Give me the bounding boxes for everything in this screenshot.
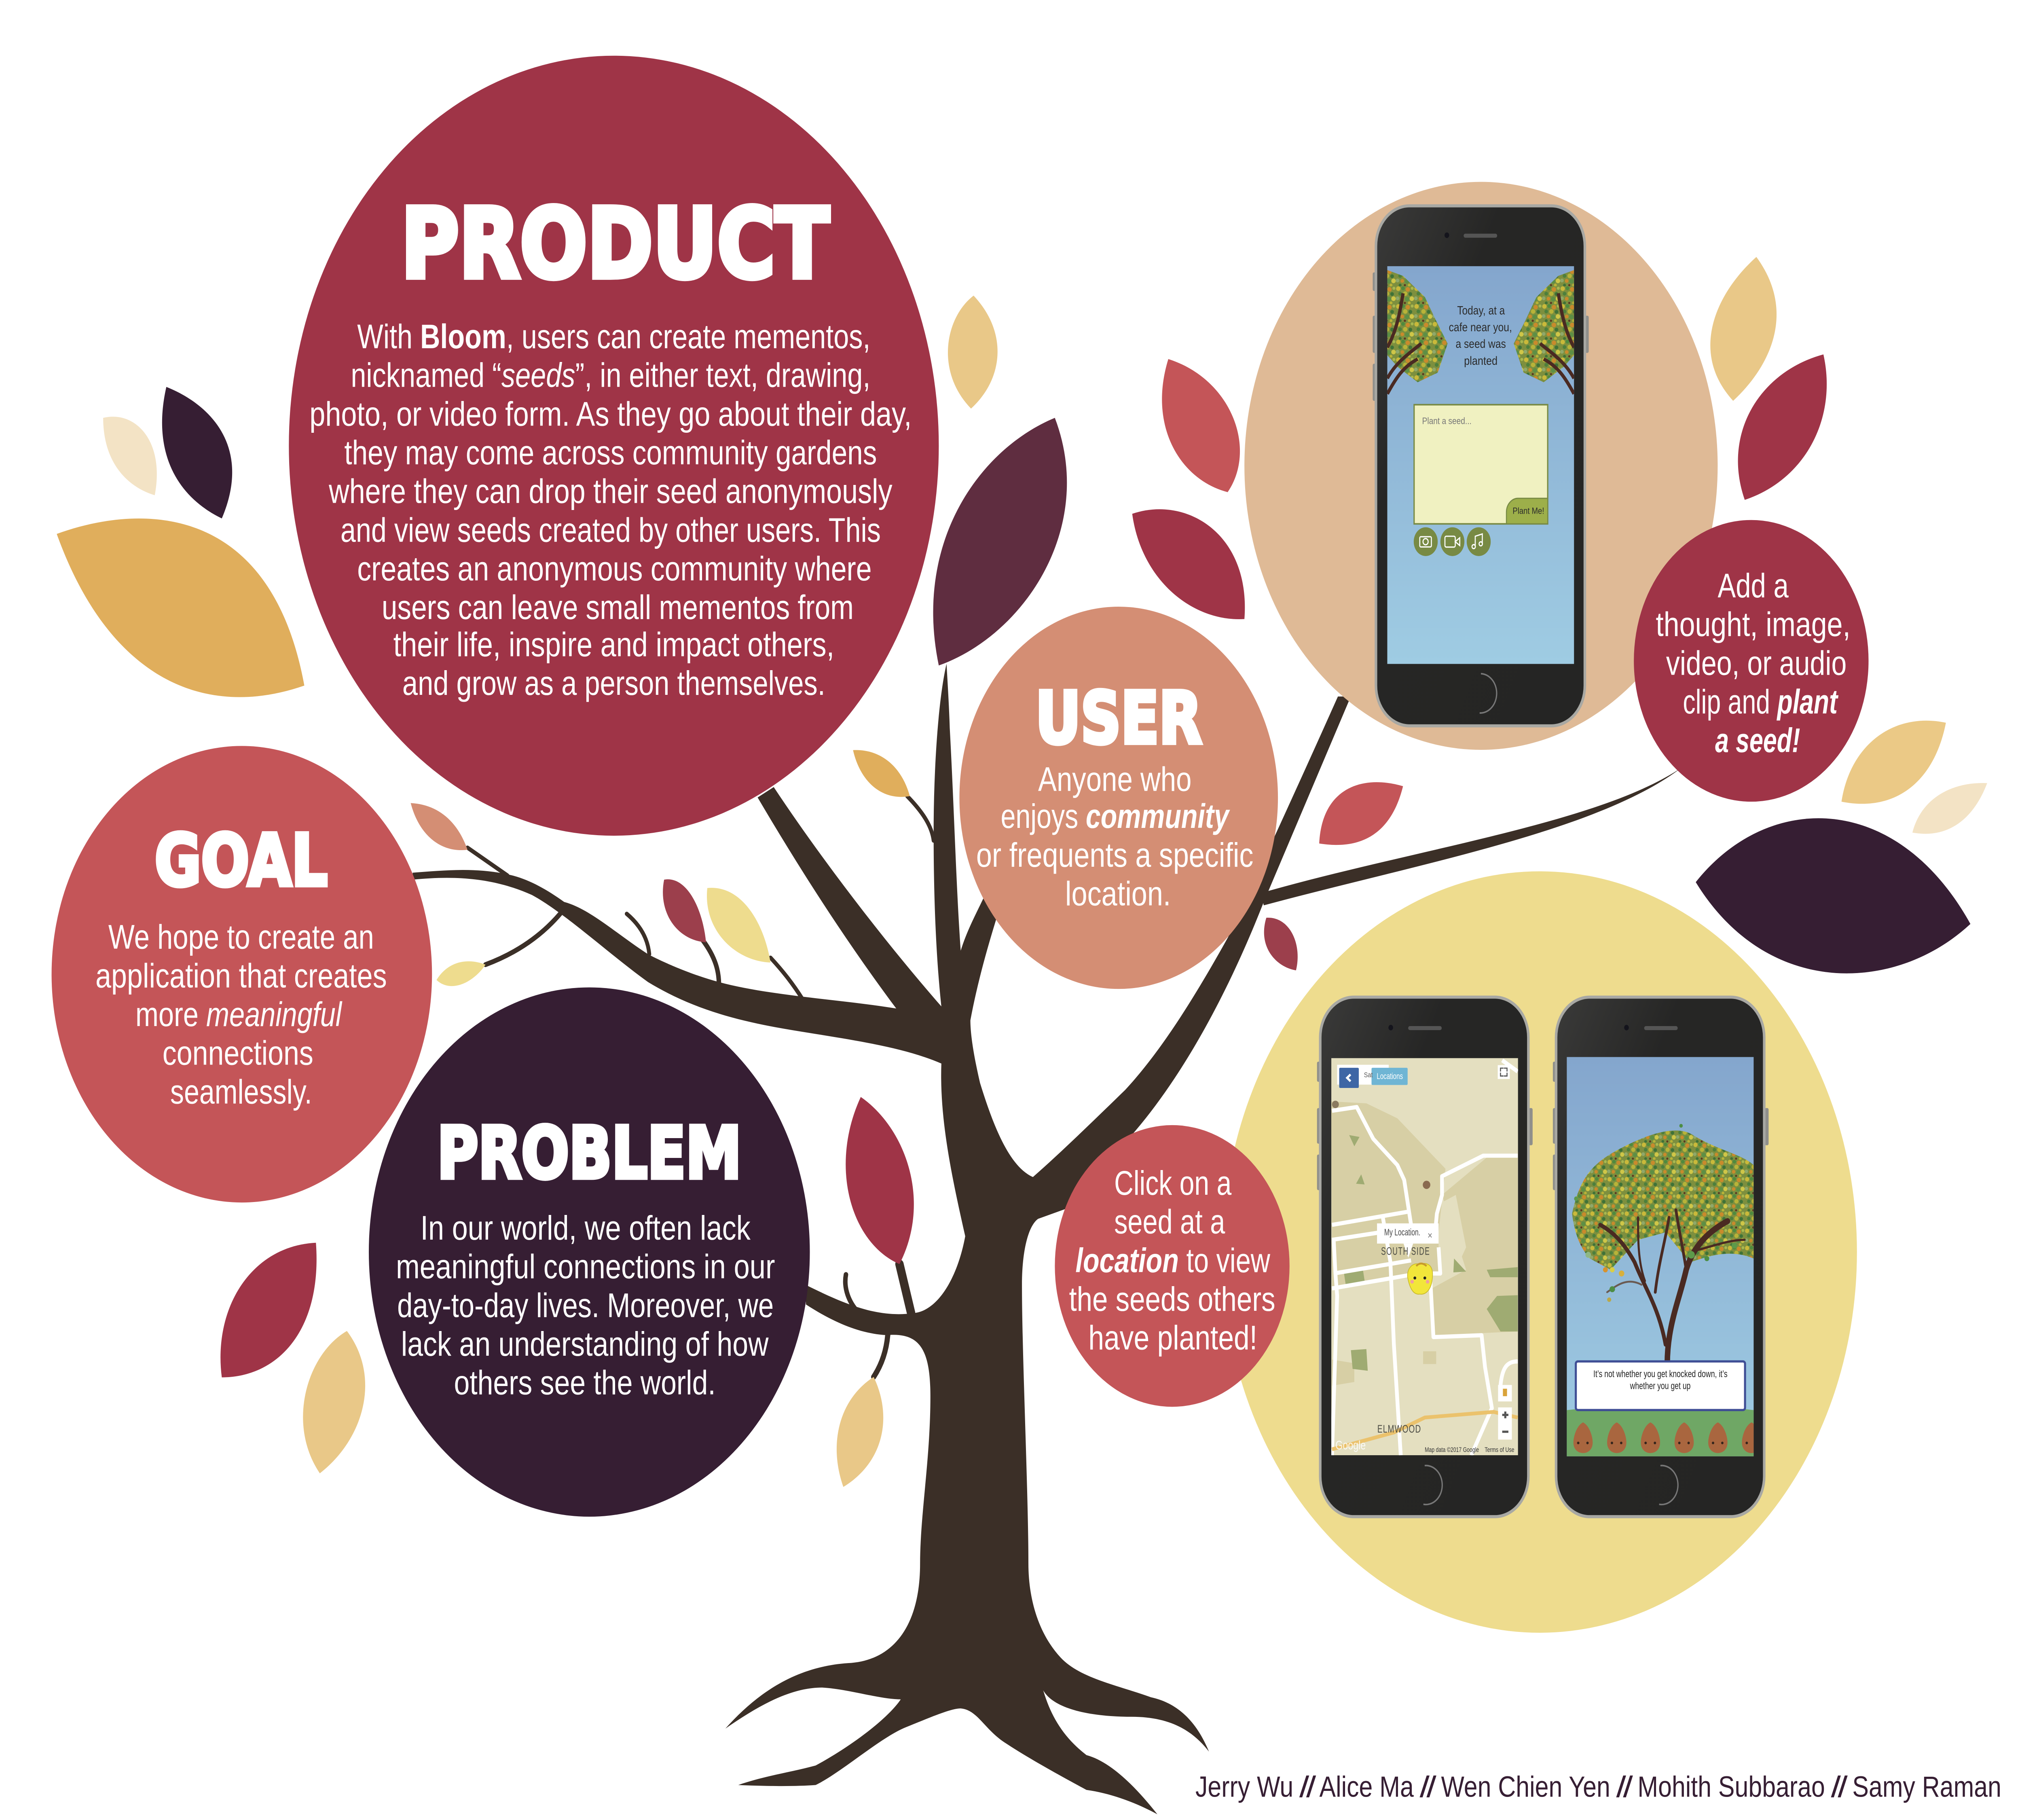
leaf: red xyxy=(1162,359,1240,492)
seed tree canopy xyxy=(1572,1130,1753,1270)
product description: where they can drop their seed anonymously xyxy=(328,473,893,510)
product description: and grow as a person themselves. xyxy=(402,665,825,703)
callout: click on a seed: Click on a xyxy=(1114,1164,1232,1202)
leaf: top tan xyxy=(948,296,998,408)
panel: problem xyxy=(369,987,810,1517)
callout: add a thought: Add a xyxy=(1717,567,1789,605)
leaf: big gold xyxy=(57,518,305,697)
map: SOUTH SIDE xyxy=(1381,1246,1430,1257)
leaf: lower left tan xyxy=(303,1331,365,1473)
map: My Location. xyxy=(1384,1227,1420,1238)
goal description: connections xyxy=(163,1035,313,1072)
map: Terms of Use xyxy=(1485,1446,1514,1454)
media buttons xyxy=(1414,527,1491,556)
product description: users can leave small mementos from xyxy=(382,589,854,626)
pepper marker xyxy=(1408,1263,1432,1294)
leaf: rose xyxy=(663,879,706,942)
map: Map data ©2017 Google xyxy=(1425,1446,1479,1454)
seed faces xyxy=(1577,1441,1748,1444)
goal description xyxy=(95,918,387,1111)
leaf: dark xyxy=(162,387,232,518)
leaf: right cream xyxy=(1912,783,1987,834)
callout: add a thought: clip and plant xyxy=(1683,683,1839,721)
callout: click on a seed: have planted! xyxy=(1088,1319,1257,1357)
screen caption: cafe near you, xyxy=(1449,320,1512,334)
leaf: small red xyxy=(1319,782,1403,845)
leaf: cream xyxy=(103,417,157,495)
leaf: big dark xyxy=(1696,818,1970,973)
credits: Jerry Wu // Alice Ma // Wen Chien Yen // Mohith Subbarao // Samy Raman xyxy=(1195,1770,2001,1803)
heading: problem: PROBLEM xyxy=(437,1112,742,1195)
quote box xyxy=(1576,1361,1745,1410)
callout: click on a seed xyxy=(1055,1125,1290,1407)
quote text: whether you get up xyxy=(1630,1380,1690,1391)
screen caption: planted xyxy=(1464,354,1497,367)
leaf: pale yellow small xyxy=(436,961,486,986)
problem description: In our world, we often lack xyxy=(421,1209,751,1247)
seeds xyxy=(1574,1422,1761,1453)
panel: goal xyxy=(52,746,432,1202)
callout: add a thought xyxy=(1634,520,1869,802)
tree xyxy=(412,664,1681,1814)
product description: and view seeds created by other users. This xyxy=(341,511,881,549)
map: Locations xyxy=(1377,1071,1403,1081)
map: Sat xyxy=(1364,1071,1373,1079)
screen caption: a seed was xyxy=(1455,337,1506,350)
heading: product: PRODUCT xyxy=(401,188,829,300)
callout: add a thought: video, or audio xyxy=(1666,644,1846,682)
seed input box: Plant a seed... xyxy=(1422,416,1472,426)
branch to the add-a-thought callout xyxy=(1261,768,1681,906)
callout: add a thought: a seed! xyxy=(1715,722,1800,760)
leaves xyxy=(57,257,1987,1487)
phone: map screen xyxy=(1317,996,1533,1518)
map xyxy=(1331,1058,1518,1455)
heading: goal: GOAL xyxy=(155,820,328,902)
leaf: right tan xyxy=(1710,257,1777,401)
problem description xyxy=(396,1209,775,1402)
panel: user xyxy=(959,607,1278,989)
panel: yellow circle backdrop xyxy=(1223,871,1857,1633)
product description: With Bloom, users can create mementos, xyxy=(357,318,870,356)
goal description: more meaningful xyxy=(135,996,343,1033)
phone: plant a seed screen xyxy=(1373,204,1589,727)
user description xyxy=(976,760,1253,913)
screen trees xyxy=(1387,270,1574,394)
callout: click on a seed: seed at a xyxy=(1114,1203,1225,1241)
panel: tan circle backdrop xyxy=(1244,182,1717,750)
leaf: salmon xyxy=(411,803,467,850)
map: ELMWOOD xyxy=(1377,1423,1421,1435)
leaf: right crimson xyxy=(1738,354,1827,500)
screen caption: Today, at a xyxy=(1457,303,1505,317)
leaf: lower left crimson xyxy=(220,1243,317,1378)
goal description: We hope to create an xyxy=(108,918,374,956)
tree trunk and branches xyxy=(412,664,1351,1814)
user description: enjoys community xyxy=(1000,798,1230,836)
panel: product xyxy=(289,56,939,836)
map: Google xyxy=(1335,1438,1366,1452)
twigs xyxy=(467,796,934,1377)
leaf: gold small xyxy=(853,750,910,797)
leaf: tan center xyxy=(837,1377,883,1487)
map: × xyxy=(1428,1230,1432,1241)
seed tree trunk xyxy=(1600,1210,1745,1363)
problem description: others see the world. xyxy=(454,1364,716,1402)
seed input box xyxy=(1414,405,1548,524)
problem description: lack an understanding of how xyxy=(401,1325,769,1363)
problem description: meaningful connections in our xyxy=(396,1248,775,1286)
product description: creates an anonymous community where xyxy=(357,550,872,588)
quote text xyxy=(1593,1368,1728,1391)
callout: click on a seed: the seeds others xyxy=(1069,1280,1275,1318)
seed input box: Plant Me! xyxy=(1512,506,1544,516)
product description: their life, inspire and impact others, xyxy=(393,626,834,664)
user description: location. xyxy=(1065,875,1171,913)
leaf: crimson center xyxy=(846,1097,914,1264)
stray foliage xyxy=(1574,1124,1737,1302)
product description: nicknamed “seeds”, in either text, drawing, xyxy=(351,357,870,394)
leaf: plum xyxy=(933,418,1067,665)
hill xyxy=(1413,1405,1908,1539)
goal description: application that creates xyxy=(95,957,387,995)
product description: photo, or video form. As they go about their day, xyxy=(309,395,912,433)
product description xyxy=(309,318,912,703)
leaf: small rose xyxy=(1264,918,1298,970)
problem description: day-to-day lives. Moreover, we xyxy=(397,1287,774,1325)
goal description: seamlessly. xyxy=(170,1073,312,1111)
user description: or frequents a specific xyxy=(976,836,1253,874)
leaf: crimson xyxy=(1132,509,1245,619)
leaf: right gold xyxy=(1842,721,1946,804)
screen caption xyxy=(1449,303,1512,367)
user description: Anyone who xyxy=(1038,760,1191,798)
callout: add a thought: thought, image, xyxy=(1656,606,1851,643)
leaf: pale yellow xyxy=(707,888,770,963)
heading: user: USER xyxy=(1036,677,1202,760)
leaves on branches xyxy=(411,750,914,1487)
product description: they may come across community gardens xyxy=(344,434,877,472)
callout: click on a seed: location to view xyxy=(1075,1242,1271,1280)
quote text: It’s not whether you get knocked down, it’s xyxy=(1593,1368,1728,1379)
phone: seed tree screen xyxy=(1413,996,1908,1539)
